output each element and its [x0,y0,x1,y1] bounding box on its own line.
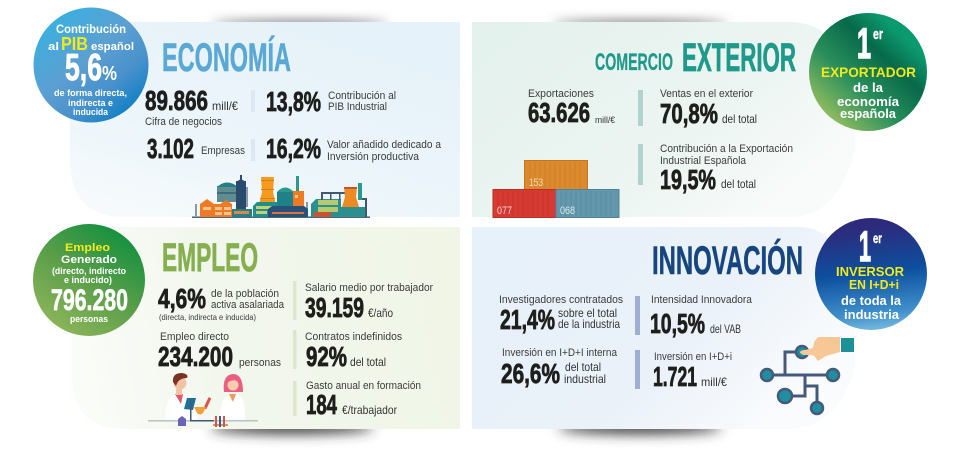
panel: economía [70,22,460,218]
panel background: economía [70,22,460,217]
icon: shipping containers: 153 [529,177,543,189]
heading: economía: ECONOMÍA [162,35,291,80]
stat: inversión interna: industrial [564,372,606,386]
heading: comercio exterior: EXTERIOR [682,36,796,80]
badge: primer inversor: er [873,230,882,246]
badge: contribución al PIB: % [102,63,117,85]
stat: contribución a la exportación: Industrial Española [660,155,747,167]
badge: contribución al PIB: al [48,41,59,53]
stat: valor añadido: Valor añadido dedicado a [327,139,442,151]
stat: contribución al PIB industrial [266,86,396,117]
heading: innovación: INNOVACIÓN [652,237,803,283]
badge: empleo generado: personas [70,314,108,324]
badge: primer inversor: de toda la [841,293,902,308]
stat: investigadores contratados [499,294,623,335]
stat: salario medio: Salario medio por trabajador [305,282,433,294]
panel: empleo [72,227,460,429]
badge circle: inversor [815,218,927,330]
icon: shipping containers: 068 [560,205,575,217]
badge: contribución al PIB [34,8,148,122]
stat: contratos indefinidos: del total [350,355,386,369]
divider bars: economía [251,90,255,161]
stat: investigadores contratados: sobre el total [558,306,617,320]
stat: investigadores contratados: Investigadores contratados [499,294,623,306]
heading: comercio exterior [595,36,796,80]
stat: contribución a la exportación: del total [721,177,756,191]
stat: contribución a la exportación: Contribución a la Exportación [660,143,793,155]
stat: inversión I+D+i: Inversión en I+D+i [654,351,732,363]
badge: empleo generado: 796.280 [51,284,128,317]
stat: gasto en formación: Gasto anual en formación [306,380,421,392]
badge: empleo generado [33,224,145,336]
badge: primer exportador [809,13,927,131]
panel background: comercio exterior [472,22,855,217]
stat: exportaciones: Exportaciones [528,88,594,100]
stat: gasto en formación [306,380,421,420]
badge circle: empleo [33,224,145,336]
stat: inversión interna: 26,6% [501,358,560,389]
divider bars: innovación [635,296,640,389]
badge: primer exportador: 1 [857,20,871,68]
stat: población activa: 4,6% [158,283,206,314]
badge: primer inversor: industria [844,307,900,322]
stat: contratos indefinidos: Contratos indefinidos [305,331,402,343]
stat: población activa: de la población [211,288,279,300]
stat: inversión interna: Inversión en I+D+I interna [502,347,618,359]
stat: cifra de negocios: mill/€ [212,99,238,113]
stat: intensidad innovadora: 10,5% [650,308,705,339]
heading: comercio exterior: COMERCIO [595,49,673,76]
stat: contribución al PIB industrial: 13,8% [266,86,321,117]
badge: empleo generado: Empleo [65,242,110,254]
shadow: top left panel [212,20,388,26]
stat: exportaciones: 63.626 [528,97,590,128]
stat: valor añadido: Inversión productiva [327,151,420,163]
badge: primer exportador: de la [853,80,884,95]
stat: contribución a la exportación [660,143,793,195]
badge: primer exportador: er [873,26,883,43]
stat: contratos indefinidos: 92% [306,341,347,372]
panel background: empleo [72,227,460,429]
stat: población activa: activa asalariada [211,299,285,311]
stat: gasto en formación: 184 [306,389,337,420]
stat: intensidad innovadora [650,294,753,339]
stat: intensidad innovadora: del VAB [710,322,741,336]
badge: contribución al PIB: inducida [73,107,109,117]
shadow: bottom right panel [558,422,722,434]
stat: investigadores contratados: 21,4% [500,304,555,335]
stat: inversión I+D+i [653,351,732,392]
badge: empleo generado: e inducido) [64,275,112,285]
stat: ventas en el exterior: del total [722,112,757,126]
badge circle: exportador [809,13,927,131]
stat: valor añadido [266,133,442,164]
badge: primer inversor [815,218,927,330]
shadow: bottom left panel [210,422,374,434]
shadow: top right panel [552,20,728,26]
divider bars: comercio [638,90,643,185]
icon: shipping containers [493,160,619,218]
stat: contribución a la exportación: 19,5% [660,164,716,195]
badge: contribución al PIB: indirecta e [68,98,113,108]
panel background: innovación [472,227,855,429]
stat: gasto en formación: €/trabajador [342,403,397,417]
stat: inversión I+D+i: mill/€ [701,375,727,389]
stat: contribución al PIB industrial: Contribución al [328,90,396,102]
stat: salario medio: 39.159 [305,292,364,323]
panel: comercio exterior [472,22,855,218]
badge: contribución al PIB: PIB [61,34,88,54]
icon: scientists in a lab [148,373,258,427]
badge: primer inversor: INVERSOR [836,264,905,279]
badge: empleo generado: (directo, indirecto [52,266,126,276]
stat: empleo directo: 234.200 [158,341,233,372]
stat: ventas en el exterior [660,88,757,129]
stat: empresas: 3.102 [147,133,194,164]
stat: empleo directo [158,331,281,372]
stat: salario medio: €/año [368,306,393,320]
badge: contribución al PIB: 5,6 [65,47,102,89]
badge: primer exportador: economía [837,94,900,109]
stat: ventas en el exterior: Ventas en el exterior [660,88,753,100]
stat: intensidad innovadora: Intensidad Innovadora [651,294,753,306]
icon: factories [192,175,370,218]
stat: ventas en el exterior: 70,8% [660,98,718,129]
stat: exportaciones: mill/€ [595,115,616,126]
badge: primer exportador: española [840,106,897,121]
stat: empresas: Empresas [201,145,245,157]
stat: población activa: (directa, indirecta e inducida) [159,313,256,322]
badge: primer inversor: EN I+D+i [849,277,899,292]
badge: contribución al PIB: español [91,41,134,53]
icon: shipping containers: 077 [497,205,512,217]
stat: inversión interna: del total [565,360,601,374]
stat: cifra de negocios: 89.866 [145,85,208,116]
icon: hand touching circuit [761,337,854,414]
stat: salario medio [305,282,433,323]
badge: primer inversor: 1 [859,223,871,271]
panel: innovación [472,227,855,429]
stat: contribución al PIB industrial: PIB Industrial [328,101,387,113]
stat: empleo directo: Empleo directo [160,331,229,343]
stat: inversión interna [501,347,618,389]
stat: población activa [158,283,285,322]
stat: empleo directo: personas [239,357,281,369]
stat: cifra de negocios: Cifra de negocios [145,116,222,128]
divider bars: empleo [293,281,296,416]
badge: empleo generado: Generado [61,254,117,266]
stat: cifra de negocios [145,85,238,128]
stat: valor añadido: 16,2% [266,133,321,164]
stat: investigadores contratados: de la industria [558,317,620,331]
stat: contratos indefinidos [305,331,402,372]
badge: contribución al PIB: Contribución [56,24,126,36]
heading: empleo: EMPLEO [162,236,258,280]
badge: primer exportador: EXPORTADOR [821,64,916,80]
stat: inversión I+D+i: 1.721 [653,361,697,392]
badge circle: PIB [34,8,148,122]
badge: contribución al PIB: de forma directa, [54,88,127,98]
